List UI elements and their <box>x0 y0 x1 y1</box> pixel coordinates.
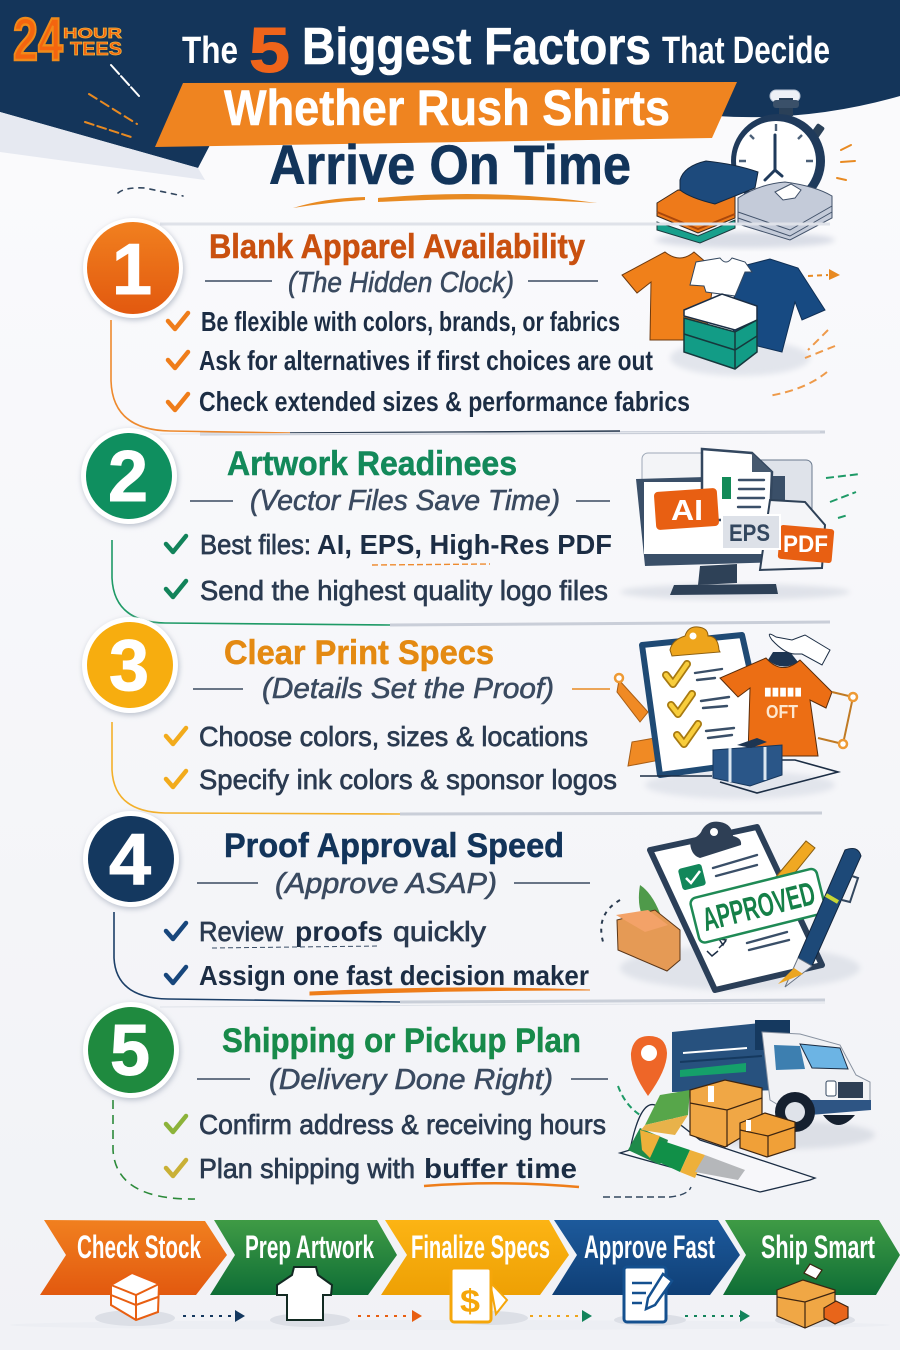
number badge 5 <box>83 1002 180 1100</box>
bullets 1: Be flexible with colors, brands, or fabrics <box>201 306 620 337</box>
illustration: approved clipboard and pen <box>601 822 861 990</box>
panel 4: proof approval speed <box>83 811 861 1002</box>
title line 1: 5 <box>249 14 290 86</box>
header band <box>0 0 900 180</box>
bullets 2 <box>166 529 612 606</box>
hanger tag <box>769 634 830 665</box>
subheading 4: (Approve ASAP) <box>275 868 497 900</box>
arrow <box>358 1315 412 1317</box>
logo: 24 Hour Tees: 24 <box>13 6 63 73</box>
bullets 5 <box>166 1109 606 1187</box>
orange stack <box>657 190 735 233</box>
bullets 2: Send the highest quality logo files <box>200 575 608 606</box>
orange shirt: OFT <box>766 702 798 722</box>
panel 5: shipping or pickup plan <box>83 1002 875 1199</box>
panel 1: blank apparel availability <box>83 218 840 434</box>
orange shirt <box>622 252 715 340</box>
orange shirt: ▮▮▮▮▮ <box>764 686 802 698</box>
truck cab <box>762 1032 870 1112</box>
illustration: truck, boxes, map and pin <box>618 1020 875 1192</box>
bullets 4: Assign one fast decision maker <box>199 960 589 991</box>
heading 1: Blank Apparel Availability <box>209 228 585 266</box>
subheading 1: (The Hidden Clock) <box>288 267 514 299</box>
step: check stock <box>40 1220 235 1326</box>
EPS badge <box>722 515 780 549</box>
icon: dollar sheet: $ <box>460 1283 480 1319</box>
bullets 4: quickly <box>393 916 486 947</box>
logo: 24 Hour Tees <box>13 6 122 73</box>
subheading 5: (Delivery Done Right) <box>269 1064 553 1096</box>
platform sheet <box>640 760 838 793</box>
left ruler <box>617 680 660 766</box>
gift box <box>713 745 782 786</box>
step: finalize specs: Finalize Specs <box>411 1229 550 1265</box>
clipboard <box>650 827 822 990</box>
document <box>702 449 772 520</box>
orange title banner: Whether Rush Shirts <box>224 80 670 136</box>
pen <box>778 848 861 987</box>
bullets 5: buffer time <box>424 1153 577 1184</box>
title line 3: Arrive On Time <box>269 133 631 196</box>
step: approve fast <box>552 1220 740 1326</box>
number badge 3 <box>82 617 179 715</box>
white shirt <box>690 258 752 296</box>
bullets 2: AI, EPS, High-Res PDF <box>317 529 612 560</box>
number badge 2 <box>81 428 178 526</box>
bullets 4: proofs <box>295 916 383 947</box>
number badge 1 <box>83 218 184 320</box>
number badge 5: 5 <box>110 1011 150 1091</box>
title swoosh <box>293 194 597 208</box>
AI badge: AI <box>671 495 703 527</box>
navy shirt <box>733 259 825 352</box>
navy folded shirt <box>680 161 758 204</box>
icon: parcels <box>777 1264 848 1328</box>
bullets 3: Specify ink colors & sponsor logos <box>199 764 617 795</box>
title line 1 <box>182 14 830 86</box>
subheading 2: (Vector Files Save Time) <box>250 485 560 517</box>
bullets 4: Review <box>199 916 284 947</box>
title line 1: Biggest Factors <box>302 18 651 76</box>
logo: 24 Hour Tees: HOUR <box>63 25 122 42</box>
icon: document and pen <box>624 1267 672 1322</box>
panel 2: artwork readiness <box>81 428 860 625</box>
orange shirt <box>720 652 832 756</box>
subheading 3: (Details Set the Proof) <box>262 673 554 705</box>
number badge 4: 4 <box>109 820 151 900</box>
approved stamp: APPROVED <box>698 874 819 938</box>
bullets 5: Plan shipping with <box>199 1153 415 1184</box>
step: ship smart <box>723 1220 900 1328</box>
pencil <box>775 841 815 885</box>
gold checks <box>666 664 698 744</box>
arrow <box>183 1315 235 1317</box>
number badge 4 <box>83 811 180 909</box>
footer process chevrons <box>10 1220 900 1330</box>
stopwatch <box>731 90 855 208</box>
bullets 5: Confirm address & receiving hours <box>199 1109 606 1140</box>
icon: dollar sheet <box>451 1268 507 1322</box>
bullets 1: Check extended sizes & performance fabrics <box>199 386 690 417</box>
grey stack <box>738 182 832 240</box>
PDF badge <box>760 500 834 570</box>
step: check stock: Check Stock <box>77 1229 201 1265</box>
monitor <box>636 476 785 566</box>
icon: shirt <box>277 1267 332 1320</box>
illustration: stopwatch and shirt stacks <box>655 90 855 248</box>
approved stamp <box>689 868 827 944</box>
arrow <box>530 1315 582 1317</box>
heading 5: Shipping or Pickup Plan <box>222 1022 581 1060</box>
illustration: checklist, shirt and gift <box>615 627 857 799</box>
bullets 2: Best files: <box>200 529 311 560</box>
bullets 3 <box>166 721 617 795</box>
green check square <box>678 863 706 891</box>
bullets 4 <box>166 916 590 995</box>
cardboard boxes <box>690 1080 795 1157</box>
step: prep artwork <box>210 1220 412 1327</box>
arrow <box>685 1315 740 1317</box>
map <box>620 1090 815 1192</box>
stacked boxes <box>684 294 757 330</box>
bullets 3: Choose colors, sizes & locations <box>199 721 588 752</box>
icon: box <box>111 1273 159 1320</box>
truck cargo <box>672 1020 790 1092</box>
number badge 3: 3 <box>109 626 149 706</box>
title line 1: The <box>182 30 238 72</box>
teal stack <box>657 220 735 243</box>
step: finalize specs <box>381 1220 582 1325</box>
kraft box and leaves <box>639 885 664 928</box>
step: prep artwork: Prep Artwork <box>245 1229 374 1265</box>
right frame <box>818 692 853 744</box>
back panels <box>642 453 752 493</box>
clipboard <box>642 635 770 775</box>
step: approve fast: Approve Fast <box>584 1229 715 1265</box>
number badge 1: 1 <box>112 230 152 310</box>
illustration: monitor with file badges <box>620 449 860 600</box>
EPS badge: EPS <box>729 520 770 547</box>
heading 2: Artwork Readinees <box>227 445 517 483</box>
number badge 2: 2 <box>108 437 148 517</box>
location pin <box>631 1036 667 1096</box>
bullets 1 <box>168 306 690 417</box>
title line 1: That Decide <box>662 30 830 72</box>
bullets 1: Ask for alternatives if first choices are out <box>199 345 653 376</box>
AI badge <box>654 488 719 530</box>
heading 3: Clear Print Specs <box>224 634 494 672</box>
logo: 24 Hour Tees: TEES <box>70 39 122 59</box>
PDF badge: PDF <box>783 531 828 558</box>
heading 4: Proof Approval Speed <box>224 827 564 865</box>
illustration: shirts and boxes <box>622 252 840 396</box>
header speed lines <box>85 65 183 196</box>
panel 3: clear print specs <box>82 617 857 814</box>
